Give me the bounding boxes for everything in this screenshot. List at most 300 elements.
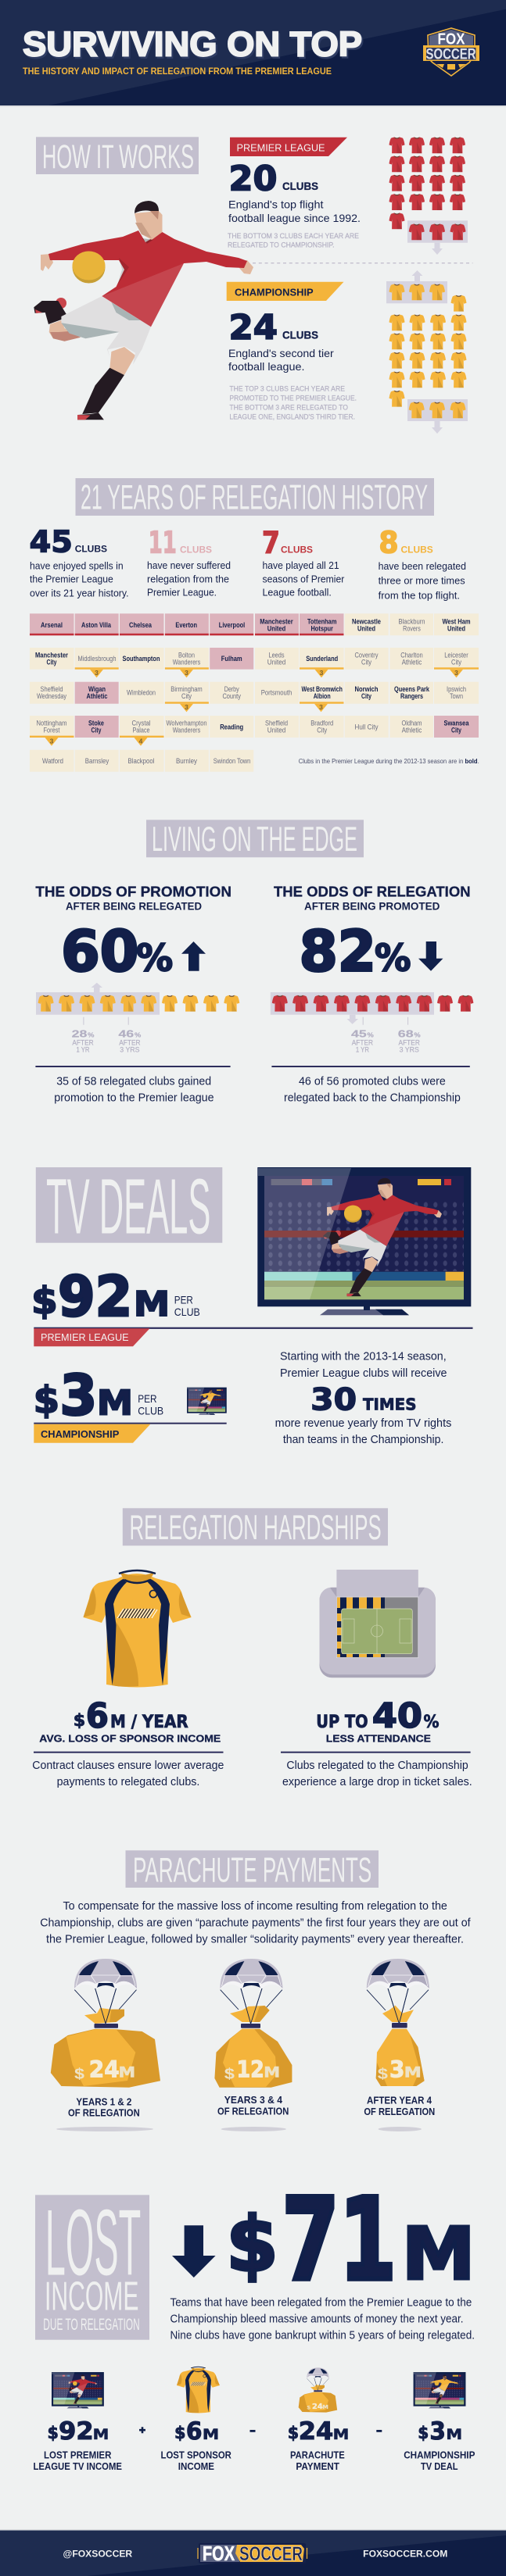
text: promotion summary: 35 of 58 relegated clubs gained: [56, 1075, 211, 1088]
table: clubs in the premier league: Leicester: [444, 651, 468, 659]
text: premier league description: [228, 198, 361, 224]
stat: 71m: [226, 2174, 475, 2306]
panel: odds of promotion: THE ODDS OF PROMOTION: [35, 884, 231, 900]
shirts: championship clubs: [386, 270, 468, 434]
panel: odds of relegation: AFTER BEING PROMOTED: [304, 900, 440, 912]
table: clubs in the premier league: United: [447, 624, 465, 632]
stat: 92m per club: [31, 1265, 200, 1330]
stat: 3m per club: [34, 1363, 163, 1428]
championship banner: CHAMPIONSHIP: [235, 286, 314, 298]
table: clubs in the premier league: 3: [50, 737, 54, 745]
callouts: 45 and 68 percent: 45: [351, 1027, 367, 1039]
championship banner: [227, 282, 344, 301]
section: relegation hardships: [32, 1508, 472, 1788]
table: clubs in the premier league: Norwich: [355, 685, 379, 693]
callouts: 28 and 46 percent: 28: [72, 1027, 87, 1039]
stat: 60 percent: %: [136, 937, 173, 980]
heading: how it works: HOW IT WORKS: [42, 139, 194, 176]
illustration: bag 24m: $: [74, 2067, 85, 2083]
stat: 45 clubs: the Premier League: [30, 573, 113, 585]
stat: 7 clubs: seasons of Premier: [263, 573, 345, 584]
callouts: 28 and 46 percent: %: [88, 1031, 94, 1038]
heading: lost income: [35, 2191, 149, 2340]
table: clubs in the premier league: Chelsea: [129, 621, 152, 629]
illustration: player: [34, 201, 253, 420]
table: clubs in the premier league: 3: [319, 703, 323, 711]
callouts: 28 and 46 percent: [72, 1017, 141, 1053]
table: clubs in the premier league: Fulham: [221, 655, 242, 663]
text: premier league description: football league since 1992.: [228, 212, 361, 224]
note: promotion and relegation: PROMOTED TO THE PREMIER LEAGUE.: [229, 394, 357, 402]
illustration: bag 12m: [214, 1959, 292, 2088]
item: parachute payment: PARACHUTE: [290, 2450, 345, 2461]
heading: living on the edge: LIVING ON THE EDGE: [152, 820, 357, 859]
stat: 92m per club: $: [31, 1280, 58, 1322]
illustration: bag 12m: 12: [236, 2056, 264, 2084]
item: lost sponsor income: $: [174, 2424, 186, 2443]
section: tv deals: TV DEALS: [46, 1163, 210, 1250]
table: clubs in the premier league: Newcastle: [352, 618, 381, 626]
illustration: bag 3m: $: [378, 2067, 389, 2083]
item: lost sponsor income: [161, 2367, 231, 2472]
text: premier league description: England's top flight: [228, 198, 324, 211]
callouts: 45 and 68 percent: 68: [398, 1027, 414, 1039]
table: clubs in the premier league: Wanderers: [173, 658, 201, 666]
stat: 45 clubs: have enjoyed spells in: [30, 559, 124, 571]
illustration: bag 24m: 24: [89, 2056, 120, 2084]
stat: 11 clubs: 11: [149, 527, 177, 560]
text: contract clauses: Contract clauses ensure lower average: [32, 1760, 224, 1772]
text: ticket sales: Clubs relegated to the Championship: [286, 1760, 468, 1772]
table: clubs in the premier league: Birmingham: [170, 685, 203, 693]
item: championship tv deal: M: [446, 2425, 462, 2443]
table: clubs in the premier league: Queens Park: [394, 685, 429, 693]
text: promotion summary: [54, 1075, 214, 1104]
footer logo: SOCCER: [239, 2543, 303, 2565]
item: championship tv deal: CHAMPIONSHIP: [404, 2450, 475, 2461]
item: championship tv deal: $: [418, 2424, 429, 2443]
note: promotion and relegation: LEAGUE ONE, ENGLAND'S THIRD TIER.: [229, 413, 355, 421]
table: clubs in the premier league: [30, 613, 479, 772]
stat: 11 clubs: Premier League.: [147, 587, 217, 598]
table: clubs in the premier league: West Ham: [443, 618, 471, 626]
table: clubs in the premier league: West Bromwich: [302, 685, 343, 693]
callout: 30 times: [275, 1351, 451, 1446]
table: clubs in the premier league: Swansea: [444, 720, 469, 727]
table: clubs in the premier league: Athletic: [86, 692, 108, 700]
stat: 92m per club: CLUB: [174, 1306, 200, 1318]
stat: 7 clubs: have played all 21: [263, 559, 339, 571]
table: clubs in the premier league: Athletic: [402, 727, 422, 734]
table: clubs in the premier league: Wolverhampton: [166, 720, 207, 727]
table: clubs in the premier league: Sheffield: [41, 685, 63, 693]
callouts: 28 and 46 percent: AFTER: [119, 1039, 141, 1047]
item: parachute payment: $: [288, 2424, 299, 2443]
table: clubs in the premier league: Liverpool: [219, 621, 245, 629]
logo: fox soccer shield: [423, 28, 479, 76]
table: clubs in the premier league: Wanderers: [173, 727, 201, 734]
table: clubs in the premier league: Coventry: [355, 651, 379, 659]
label: years 1 and 2: [68, 2096, 140, 2119]
banner: premier league: PREMIER LEAGUE: [41, 1331, 129, 1343]
table: clubs in the premier league: Nottingham: [36, 720, 67, 727]
table: clubs in the premier league: City: [361, 692, 371, 700]
callouts: 45 and 68 percent: [351, 1017, 421, 1053]
stat: 11 clubs: have never suffered: [147, 559, 231, 571]
text: relegation summary: relegated back to the Championship: [284, 1091, 461, 1104]
table: clubs in the premier league: Sheffield: [265, 720, 288, 727]
table: clubs in the premier league: Tottenham: [307, 618, 337, 626]
stat: 60 percent: 60: [61, 919, 138, 984]
table: clubs in the premier league: Bradford: [310, 720, 333, 727]
text: contract clauses: payments to relegated clubs.: [57, 1776, 199, 1788]
table: clubs in the premier league: 3: [185, 669, 188, 677]
subtitle: THE HISTORY AND IMPACT OF RELEGATION FROM THE PREMIER LEAGUE: [23, 66, 332, 77]
divider: [253, 263, 472, 264]
stat: 71m: M: [402, 2213, 475, 2296]
heading: living on the edge: [146, 820, 364, 859]
text: championship description: England's second tier: [228, 347, 334, 359]
table: clubs in the premier league: Arsenal: [41, 621, 63, 629]
item: lost tv income: $: [47, 2424, 59, 2443]
stat: 11 clubs: CLUBS: [180, 545, 212, 556]
stat: 7 clubs: 7: [262, 527, 280, 560]
table: clubs in the premier league: United: [267, 624, 285, 632]
table: clubs in the premier league: Town: [450, 692, 463, 700]
heading: relegation hardships: [123, 1508, 388, 1547]
title: SURVIVING ON TOP: [24, 27, 364, 66]
table: clubs in the premier league: Swindon Town: [214, 757, 250, 765]
label: years 1 and 2: OF RELEGATION: [68, 2108, 140, 2119]
banner: championship: [34, 1424, 150, 1443]
text: parachute intro: [40, 1900, 472, 1945]
callouts: 45 and 68 percent: 1 YR: [356, 1045, 369, 1053]
illustration: bag 12m: $: [224, 2067, 235, 2083]
label: after year 4: OF RELEGATION: [364, 2106, 435, 2117]
stat: up to 40 percent: 40: [372, 1696, 422, 1736]
text: championship description: [228, 347, 334, 373]
panel: odds of relegation: THE ODDS OF RELEGATION: [274, 884, 471, 900]
item: lost tv income: M: [93, 2425, 109, 2443]
table: clubs in the premier league: City: [361, 658, 372, 666]
callouts: 28 and 46 percent: AFTER: [72, 1039, 94, 1047]
item: championship tv deal: [404, 2372, 475, 2472]
illustration: television: [257, 1167, 471, 1315]
arrow: up: [181, 941, 206, 971]
text: parachute intro: the Premier League, followed by smaller “solidarity payments” every year thereafter.: [46, 1933, 464, 1945]
text: bankrupt: Championship bleed massive amounts of money the next year.: [170, 2313, 463, 2326]
label: years 3 and 4: [217, 2095, 289, 2117]
logo: fox soccer shield: SOCCER: [425, 46, 476, 63]
stat: up to 40 percent: UP TO: [316, 1712, 368, 1732]
stat: 20 clubs: CLUBS: [282, 180, 318, 192]
text: relegation summary: 46 of 56 promoted clubs were: [299, 1075, 446, 1088]
table: clubs in the premier league: City: [451, 658, 462, 666]
heading: parachute payments: [125, 1850, 379, 1889]
item: championship tv deal: TV DEAL: [421, 2461, 458, 2472]
section: lost income: [33, 2174, 475, 2472]
table: clubs in the premier league: Albion: [314, 692, 331, 700]
table: clubs in the premier league: City: [451, 727, 461, 734]
table: clubs in the premier league: Burnley: [176, 757, 198, 765]
table: clubs in the premier league: Middlesbrough: [78, 655, 117, 663]
table: clubs in the premier league: Wigan: [88, 685, 106, 693]
callout: 30 times: Starting with the 2013-14 season,: [280, 1351, 447, 1363]
table: clubs in the premier league: 3: [185, 703, 188, 711]
illustration: bag 24m: [51, 1959, 160, 2088]
stat: 71m: 71: [282, 2174, 397, 2306]
stat: 8 clubs: CLUBS: [400, 545, 433, 556]
table: clubs in the premier league: Athletic: [402, 658, 422, 666]
table: clubs in the premier league: City: [317, 727, 328, 734]
item: parachute payment: 24: [299, 2417, 333, 2446]
section: parachute payments: [40, 1850, 472, 2131]
illustration: bag 12m: M: [264, 2063, 280, 2081]
banner: championship: CHAMPIONSHIP: [41, 1428, 120, 1440]
illustration: bag 3m: [367, 1959, 429, 2086]
logo: fox soccer shield: FOX: [438, 30, 465, 48]
label: attendance: LESS ATTENDANCE: [326, 1732, 431, 1744]
text: contract clauses: [32, 1760, 224, 1788]
table: clubs in the premier league: Hotspur: [310, 624, 333, 632]
footer: [0, 2529, 506, 2576]
stat: 7 clubs: [262, 527, 345, 598]
stat: 92m per club: PER: [174, 1293, 193, 1306]
illustration: bag 3m: 3: [389, 2056, 404, 2084]
callouts: 45 and 68 percent: 3 YRS: [400, 1045, 419, 1053]
item: lost tv income: LOST PREMIER: [44, 2450, 111, 2461]
stat: 7 clubs: League football.: [263, 587, 332, 598]
table: clubs in the premier league: Portsmouth: [261, 689, 292, 697]
header band: [0, 0, 506, 107]
section: how it works: [34, 137, 473, 434]
stat: up to 40 percent: %: [424, 1712, 439, 1732]
table: clubs in the premier league: Watford: [42, 757, 63, 765]
table: clubs in the premier league: Everton: [175, 621, 197, 629]
label: years 3 and 4: OF RELEGATION: [217, 2106, 289, 2117]
text: bankrupt: Nine clubs have gone bankrupt within 5 years of being relegated.: [170, 2330, 475, 2342]
table: clubs in the premier league: Leeds: [269, 651, 285, 659]
stat: 24 clubs: CLUBS: [282, 329, 318, 341]
stat: 8 clubs: [379, 527, 466, 601]
callout: 30 times: 30: [310, 1382, 357, 1417]
note: bottom 3 relegated: RELEGATED TO CHAMPIONSHIP.: [228, 241, 335, 249]
stat: 3m per club: $: [34, 1379, 59, 1421]
table: clubs in the premier league: Manchester: [260, 618, 293, 626]
item: lost sponsor income: LOST SPONSOR: [161, 2450, 231, 2461]
stat: 82 percent: 82: [300, 919, 376, 984]
premier league banner: [230, 138, 347, 156]
note: bottom 3 relegated: [228, 232, 359, 249]
stat: 11 clubs: relegation from the: [147, 573, 229, 584]
label: after year 4: [364, 2095, 435, 2117]
stat: 3m per club: 3: [59, 1363, 97, 1428]
premier league banner: PREMIER LEAGUE: [236, 142, 325, 154]
item: lost sponsor income: M: [203, 2425, 219, 2443]
label: years 3 and 4: YEARS 3 & 4: [224, 2095, 282, 2106]
item: lost tv income: LEAGUE TV INCOME: [33, 2461, 122, 2472]
table: clubs in the premier league: Rovers: [403, 624, 421, 632]
callouts: 45 and 68 percent: AFTER: [399, 1039, 420, 1047]
stat: 20 clubs: [229, 159, 318, 198]
note: promotion and relegation: THE TOP 3 CLUBS EACH YEAR ARE: [229, 384, 345, 392]
stat: 24 clubs: 24: [229, 308, 278, 348]
icon: small tv: [187, 1388, 227, 1415]
title: SURVIVING ON TOP: [23, 26, 362, 64]
illustration: bag 24m: M: [119, 2063, 135, 2081]
label: years 1 and 2: YEARS 1 & 2: [76, 2096, 131, 2107]
panel: odds of promotion: AFTER BEING RELEGATED: [66, 900, 202, 912]
table: clubs in the premier league: United: [357, 624, 375, 632]
table: clubs in the premier league: City: [181, 692, 192, 700]
item: lost tv income: [33, 2372, 122, 2472]
heading: tv deals: [36, 1163, 222, 1250]
callouts: 45 and 68 percent: %: [414, 1031, 421, 1038]
table: clubs in the premier league: Palace: [133, 727, 150, 734]
item: championship tv deal: 3: [429, 2417, 446, 2446]
callouts: 45 and 68 percent: %: [368, 1031, 374, 1038]
callouts: 28 and 46 percent: 3 YRS: [120, 1045, 139, 1053]
footer logo: [198, 2542, 307, 2565]
table: clubs in the premier league: County: [222, 692, 241, 700]
heading: lost income: DUE TO RELEGATION: [43, 2316, 140, 2334]
panel: odds of relegation: [271, 884, 473, 1104]
text: parachute intro: Championship, clubs are given “parachute payments” the first four years they are out of: [40, 1917, 472, 1929]
callout: 30 times: Premier League clubs will receive: [280, 1367, 447, 1380]
section: tv deals: [31, 1163, 472, 1446]
stat: 92m per club: M: [134, 1284, 170, 1324]
section: lost income: LOST: [45, 2191, 141, 2296]
table: clubs in the premier league: Oldham: [402, 720, 422, 727]
shadow: bag 12m: [221, 2127, 286, 2131]
table: clubs in the premier league: United: [267, 658, 285, 666]
table: clubs in the premier league: City: [47, 658, 57, 666]
item: parachute payment: M: [333, 2425, 349, 2443]
shadow: bag 24m: [56, 2127, 153, 2131]
stat: 24 clubs: [229, 308, 318, 348]
icon: jersey: [83, 1570, 192, 1688]
label: sponsor income: AVG. LOSS OF SPONSOR INCOME: [39, 1732, 221, 1744]
text: parachute intro: To compensate for the massive loss of income resulting from relegation to the: [63, 1900, 447, 1913]
banner: premier league: [34, 1328, 149, 1346]
footer logo: FOX: [203, 2542, 235, 2565]
icon: stadium: [319, 1570, 436, 1677]
text: ticket sales: [282, 1760, 472, 1788]
table: clubs in the premier league: Barnsley: [85, 757, 109, 765]
callouts: 28 and 46 percent: 1 YR: [77, 1045, 90, 1053]
item: parachute payment: PAYMENT: [296, 2461, 339, 2472]
shirts: premier league clubs: [389, 138, 468, 255]
stat: 6m per year: $: [74, 1711, 85, 1731]
stat: 92m per club: 92: [58, 1265, 132, 1330]
table: clubs in the premier league: Forest: [44, 727, 60, 734]
table: clubs in the premier league: Blackpool: [128, 757, 155, 765]
table: clubs in the premier league: Bolton: [178, 651, 195, 659]
heading: lost income: INCOME: [45, 2274, 138, 2320]
stat: 8 clubs: have been relegated: [379, 560, 466, 572]
callout: 30 times: TIMES: [363, 1395, 416, 1413]
table: clubs in the premier league: Wednesday: [37, 692, 66, 700]
stat: 6m per year: [74, 1696, 188, 1736]
stat: 20 clubs: 20: [229, 159, 277, 198]
stat: 82 percent: %: [375, 937, 411, 980]
operator: plus: [139, 2427, 145, 2433]
table: clubs in the premier league: Aston Villa: [81, 621, 111, 629]
table: clubs in the premier league: Sunderland: [306, 655, 338, 663]
callouts: 45 and 68 percent: AFTER: [352, 1039, 373, 1047]
text: promotion summary: promotion to the Premier league: [54, 1091, 214, 1104]
text: bankrupt: Teams that have been relegated from the Premier League to the: [170, 2296, 472, 2309]
text: ticket sales: experience a large drop in ticket sales.: [282, 1776, 472, 1788]
section: living on the edge: [35, 820, 473, 1104]
table: clubs in the premier league: Manchester: [35, 651, 68, 659]
stat: 6m per year: 6: [86, 1696, 109, 1736]
stat: up to 40 percent: [316, 1696, 439, 1736]
text: bankrupt: [170, 2296, 475, 2342]
table: clubs in the premier league: Stoke: [88, 720, 104, 727]
stat: 3m per club: CLUB: [138, 1405, 163, 1417]
shadow: bag 3m: [379, 2127, 422, 2131]
item: parachute payment: [288, 2367, 349, 2472]
callout: 30 times: than teams in the Championship.: [283, 1434, 443, 1446]
stat: 7 clubs: CLUBS: [281, 545, 313, 556]
arrow: big down: [172, 2225, 216, 2278]
table: clubs in the premier league: Ipswich: [447, 685, 466, 693]
arrow: down: [418, 941, 443, 971]
table: clubs in the premier league: United: [267, 727, 285, 734]
callout: 30 times: more revenue yearly from TV rights: [275, 1417, 451, 1430]
table: clubs in the premier league: Wimbledon: [127, 689, 156, 697]
table: clubs in the premier league: Blackburn: [399, 618, 425, 626]
stat: 45 clubs: 45: [30, 526, 73, 559]
label: after year 4: AFTER YEAR 4: [367, 2095, 432, 2106]
stat: 3m per club: PER: [138, 1392, 156, 1405]
shirts: relegation: [271, 992, 473, 1024]
table: clubs in the premier league: 3: [95, 669, 99, 677]
item: lost sponsor income: INCOME: [178, 2461, 214, 2472]
table: clubs in the premier league: 3: [454, 669, 458, 677]
stat: 45 clubs: CLUBS: [75, 544, 107, 555]
stat: 8 clubs: 8: [379, 527, 399, 560]
text: championship description: football league.: [228, 360, 305, 373]
shirts: promotion: [36, 983, 239, 1015]
stat: 6m per year: M / YEAR: [110, 1712, 188, 1732]
note: promotion and relegation: THE BOTTOM 3 ARE RELEGATED TO: [229, 404, 348, 412]
stat: 45 clubs: [30, 526, 129, 598]
operator: minus: [376, 2430, 382, 2432]
callouts: 28 and 46 percent: 46: [118, 1027, 134, 1039]
stat: 71m: $: [226, 2201, 278, 2289]
table: clubs in the premier league: Charlton: [400, 651, 423, 659]
stat: 45 clubs: over its 21 year history.: [30, 587, 129, 598]
table: clubs in the premier league: Crystal: [131, 720, 151, 727]
table: clubs in the premier league: City: [91, 727, 102, 734]
panel: odds of promotion: [35, 884, 239, 1104]
table: clubs in the premier league: 3: [320, 669, 324, 677]
stat: 3m per club: M: [97, 1384, 133, 1424]
item: lost sponsor income: 6: [186, 2417, 203, 2446]
footer url: FOXSOCCER.COM: [363, 2549, 447, 2560]
stat: 11 clubs: [147, 527, 231, 598]
table: clubs in the premier league: Southampton: [122, 655, 160, 663]
stat: 8 clubs: three or more times: [379, 575, 465, 587]
section: 21 years of relegation history: [30, 478, 479, 772]
note: promotion and relegation: [229, 384, 357, 421]
stat: 8 clubs: from the top flight.: [379, 589, 460, 601]
table: clubs in the premier league: 4: [139, 737, 143, 745]
heading: how it works: [36, 137, 199, 176]
operator: minus: [250, 2430, 255, 2432]
